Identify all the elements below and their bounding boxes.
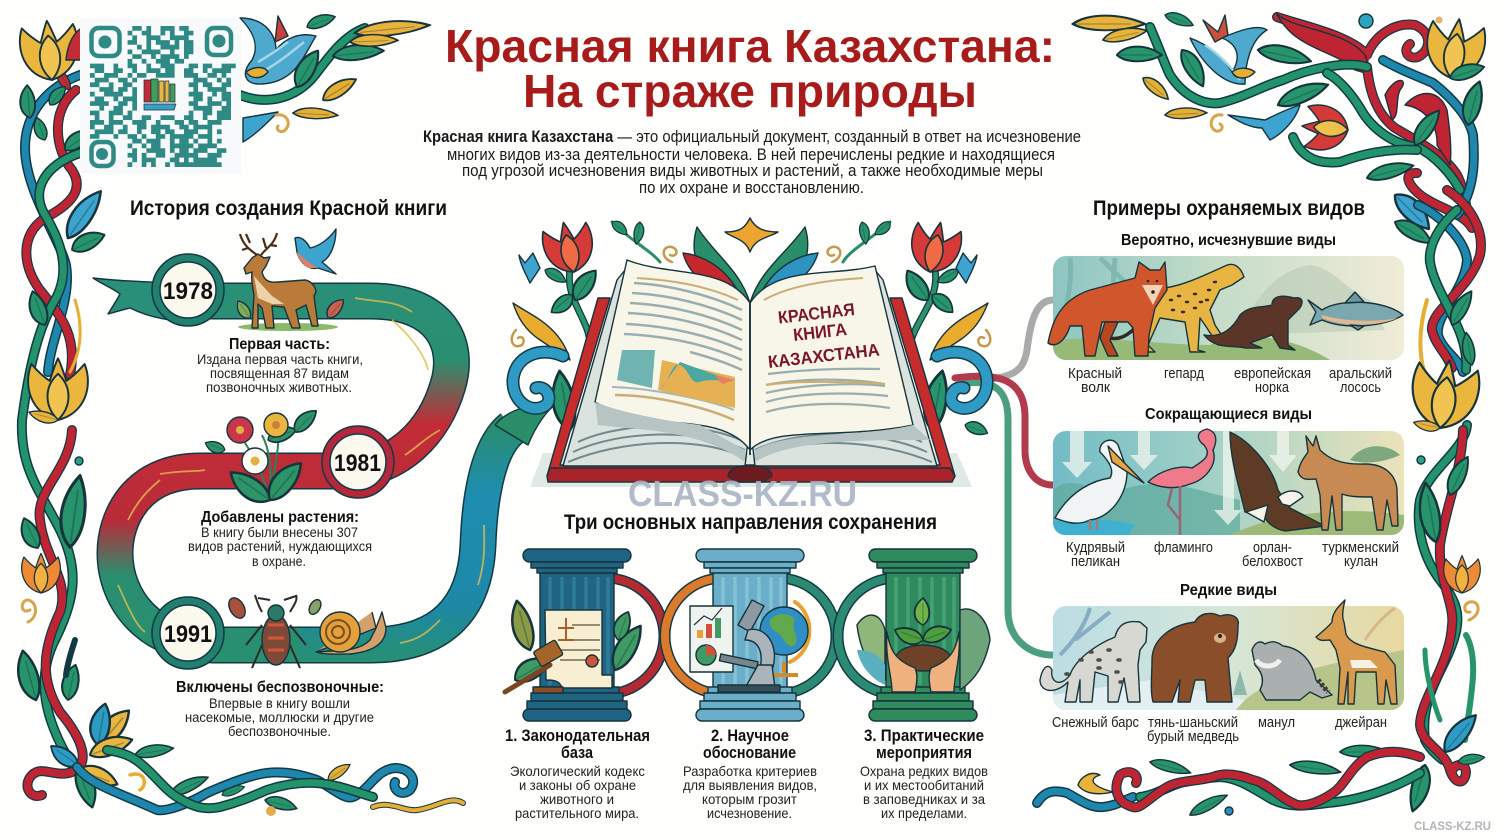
year marker 1981 (322, 426, 394, 498)
text: first part (197, 336, 363, 395)
intro paragraph: под угрозой исчезновения виды животных и растений, а также необходимые меры (462, 162, 1043, 180)
subheading: rare: Редкие виды (1180, 582, 1277, 599)
icon: deer and bird (233, 229, 347, 331)
text: direction 1: и законы об охране (519, 777, 636, 793)
text: direction 2: Разработка критериев (683, 763, 817, 779)
text: first part: позвоночных животных. (206, 379, 352, 395)
icon: insects and snail (225, 595, 386, 668)
labels: rare species (1052, 715, 1387, 745)
page block (563, 270, 748, 466)
pillar 2: science (690, 549, 809, 721)
icon: brown bear (1151, 614, 1238, 702)
text: invertebrates (176, 679, 384, 739)
left page map images (617, 350, 655, 388)
intro paragraph (423, 128, 1081, 197)
top left ornament (66, 11, 430, 142)
text: direction 1: 1. Законодательная (505, 726, 650, 745)
labels: declining species: кулан (1344, 554, 1378, 570)
icon: white-tailed eagle (1230, 432, 1325, 531)
text: direction 3: 3. Практические (864, 726, 984, 745)
icon: red wolf (1048, 262, 1167, 356)
labels: extinct species: аральский (1329, 366, 1392, 382)
text: direction 1: растительного мира. (515, 805, 639, 821)
year marker 1991: 1991 (164, 621, 212, 648)
text: direction 3 (860, 726, 988, 821)
text: direction 1 (505, 726, 650, 821)
year marker 1978: 1978 (163, 278, 213, 305)
page title: КНИГА (792, 319, 848, 345)
weave rings behind pillars (548, 578, 954, 694)
top right ornament (1073, 9, 1488, 228)
labels: declining species (1066, 540, 1399, 570)
text: invertebrates: беспозвоночные. (228, 723, 331, 739)
text: first part: Издана первая часть книги, (197, 351, 363, 367)
labels: extinct species (1068, 366, 1392, 396)
left page (595, 260, 750, 450)
icon: flowers (203, 405, 320, 509)
labels: rare species: манул (1258, 715, 1295, 731)
text: direction 2 (683, 726, 817, 821)
labels: declining species: белохвост (1242, 554, 1303, 570)
icon: pelican (1055, 440, 1144, 530)
icon: goitered gazelle (1316, 600, 1397, 704)
labels: declining species: Кудрявый (1066, 540, 1125, 556)
year marker 1991 (152, 597, 224, 669)
subheading: extinct: Вероятно, исчезнувшие виды (1121, 232, 1336, 249)
labels: extinct species: норка (1255, 380, 1290, 396)
bottom left border ornament (77, 742, 463, 816)
title (445, 20, 1055, 117)
timeline ribbon (93, 278, 558, 645)
icon: snow leopard (1040, 622, 1147, 702)
labels: extinct species: европейская (1234, 366, 1311, 382)
pillar 1: legislation (505, 549, 648, 721)
book cover (547, 298, 955, 476)
text: direction 3: и их местообитаний (864, 777, 984, 793)
text: direction 3: мероприятия (876, 743, 972, 762)
year marker 1981: 1981 (334, 450, 381, 477)
page title: КАЗАХСТАНА (767, 339, 881, 372)
right border ornament (1389, 187, 1485, 814)
icon: cheetah (1102, 264, 1244, 352)
pillar 3: practice (857, 549, 990, 721)
open book with floral ornament (512, 217, 990, 487)
panel: rare species (1040, 600, 1404, 710)
floral ornament around book (512, 217, 990, 438)
icon: chart board (690, 606, 733, 672)
text: plants added: Добавлены растения: (201, 509, 359, 526)
year marker 1978 (152, 254, 224, 326)
text: direction 3: Охрана редких видов (860, 763, 988, 779)
left page text lines (637, 278, 738, 300)
title: На страже природы (523, 65, 977, 117)
text: direction 1: Экологический кодекс (510, 763, 645, 779)
labels: rare species: Снежный барс (1052, 715, 1139, 731)
text: first part: Первая часть: (229, 336, 330, 353)
panel: declining species (1053, 429, 1404, 535)
watermark: corner: CLASS-KZ.RU (1414, 819, 1491, 833)
heading: history: История создания Красной книги (130, 197, 447, 220)
text: plants added: В книгу были внесены 307 (201, 524, 358, 540)
labels: declining species: орлан- (1253, 540, 1292, 556)
bottom right border ornament (1037, 745, 1420, 819)
text: direction 2: обоснование (703, 743, 796, 762)
icon: turkmen kulan (1298, 436, 1398, 530)
right page lines (764, 278, 863, 300)
icon: gavel (505, 640, 563, 693)
intro paragraph: по их охране и восстановлению. (639, 179, 864, 197)
text: invertebrates: Впервые в книгу вошли (209, 695, 350, 711)
labels: extinct species: лосось (1340, 380, 1381, 396)
text: plants added (188, 509, 372, 569)
text: first part: посвященная 87 видам (210, 365, 349, 381)
text: direction 1: база (561, 743, 593, 762)
icon: globe (760, 602, 809, 675)
text: direction 2: исчезновение. (707, 805, 792, 821)
watermark: CLASS-KZ.RU (628, 473, 857, 514)
labels: extinct species: гепард (1164, 366, 1204, 382)
text: direction 2: для выявления видов, (683, 777, 817, 793)
labels: rare species: джейран (1335, 715, 1387, 731)
text: direction 1: животного и (540, 791, 614, 807)
text: direction 3: их пределами. (881, 805, 967, 821)
icon: aral salmon (1308, 292, 1403, 330)
intro paragraph: многих видов из-за деятельности человека. В ней перечислены редкие и находящиеся (447, 146, 1055, 164)
labels: extinct species: волк (1081, 380, 1111, 396)
icon: european mink (1204, 296, 1302, 350)
left border ornament (12, 18, 135, 810)
right page (750, 266, 913, 450)
QR code (80, 18, 241, 174)
panel: probably extinct species (1048, 256, 1404, 360)
icon: manul (1252, 642, 1332, 700)
labels: extinct species: Красный (1068, 366, 1122, 382)
labels: declining species: фламинго (1154, 540, 1213, 556)
page title (762, 297, 881, 372)
connector lines from book to species panels (955, 300, 1053, 655)
icon: landscape (857, 615, 885, 680)
labels: rare species: бурый медведь (1147, 729, 1239, 745)
text: invertebrates: Включены беспозвоночные: (176, 679, 384, 696)
subheading: declining: Сокращающиеся виды (1145, 406, 1312, 423)
spine (728, 466, 772, 482)
labels: rare species: тянь-шаньский (1148, 715, 1238, 731)
labels: declining species: туркменский (1322, 540, 1399, 556)
text: invertebrates: насекомые, моллюски и другие (185, 709, 374, 725)
text: plants added: видов растений, нуждающихся (188, 538, 372, 554)
text: direction 2: которым грозит (702, 791, 798, 807)
page title: КРАСНАЯ (777, 299, 856, 328)
labels: declining species: пеликан (1071, 554, 1120, 570)
icon: flamingo (1148, 429, 1216, 535)
icon: legal scroll (545, 610, 612, 688)
heading: examples: Примеры охраняемых видов (1093, 197, 1365, 220)
icon: microscope (718, 600, 780, 692)
text: direction 2: 2. Научное (711, 726, 789, 745)
text: direction 3: в заповедниках и за (863, 791, 985, 807)
icon: plant in hands (887, 598, 959, 692)
text: plants added: в охране. (252, 553, 306, 569)
title: Красная книга Казахстана: (445, 20, 1055, 72)
heading: three directions: Три основных направления сохранения (564, 511, 937, 534)
intro paragraph: Красная книга Казахстана — это официальный документ, созданный в ответ на исчезновение (423, 128, 1081, 146)
